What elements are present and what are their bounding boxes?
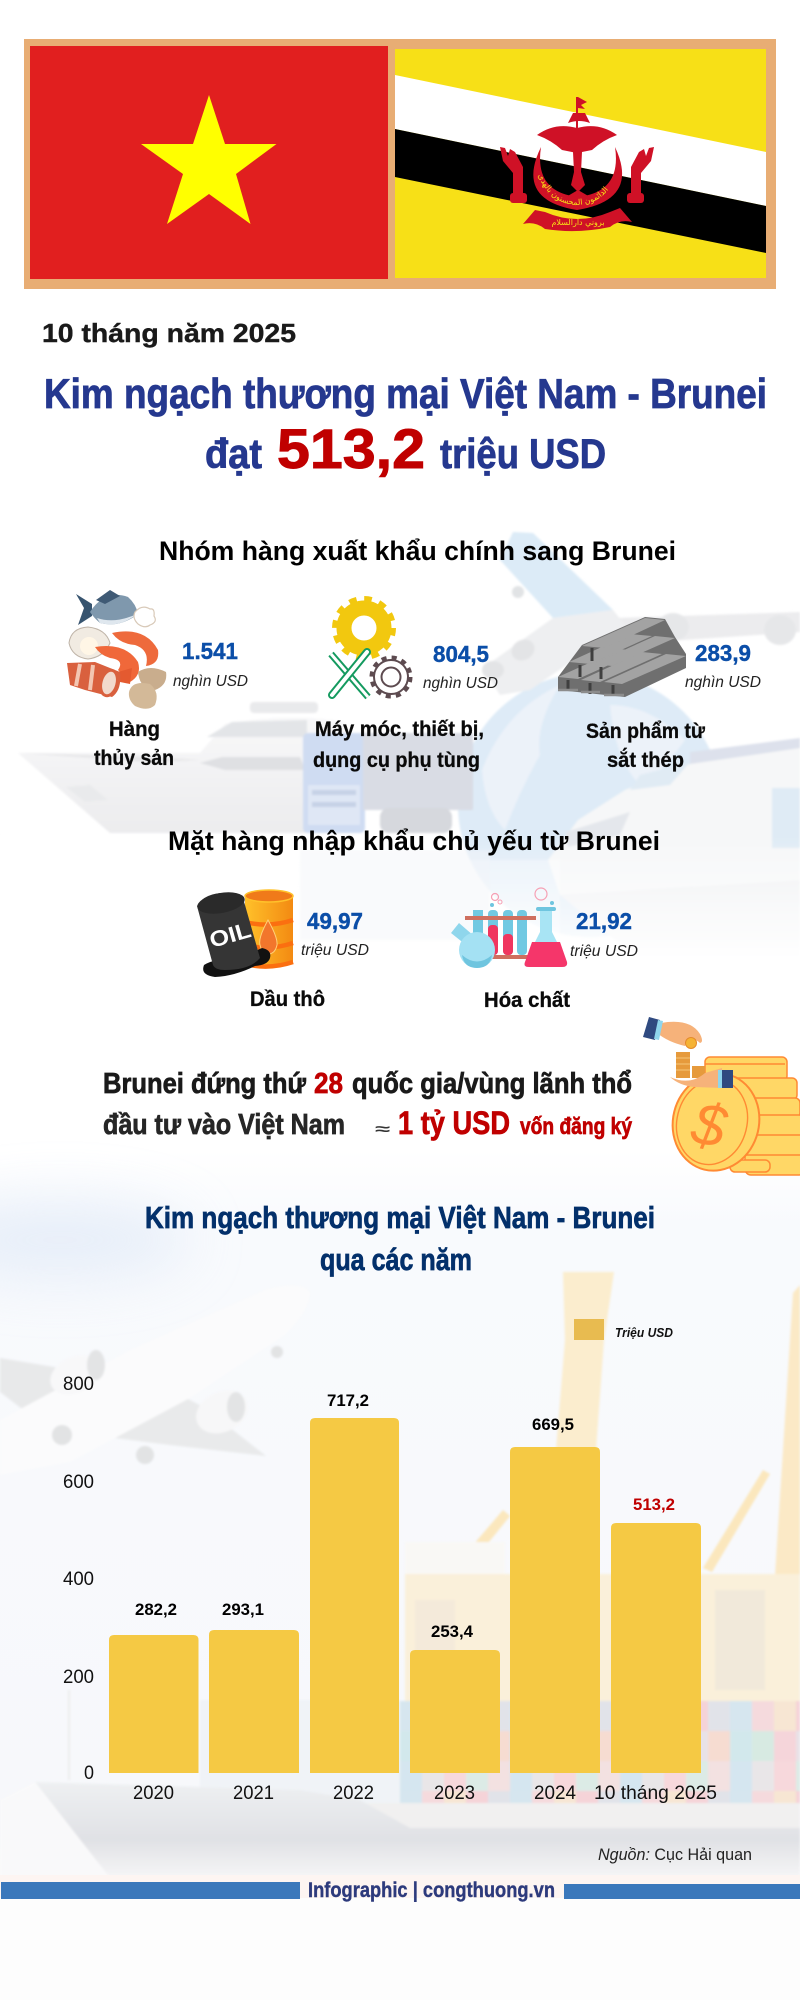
unit: chemicals: triệu USD (570, 943, 638, 960)
bar: 2020: 282,2 (135, 1600, 177, 1619)
bar: 2022 (310, 1391, 399, 1804)
heading: imports: Mặt hàng nhập khẩu chủ yếu từ Brunei (168, 826, 660, 856)
text line 1: quốc gia/vùng lãnh thổ (352, 1068, 632, 1100)
unit: crude oil: triệu USD (301, 942, 369, 959)
value: crude oil: 49,97 (307, 908, 363, 934)
source: Nguồn: Cục Hải quan (598, 1845, 752, 1864)
value: machinery: 804,5 (433, 641, 489, 667)
reflection haze (0, 835, 800, 960)
globe (458, 673, 722, 937)
icon: oil barrels: OIL (206, 917, 254, 953)
background image: transport collage (0, 532, 800, 960)
footer (1, 1879, 800, 1902)
flag: Brunei: بروني دارالسلام (551, 218, 605, 227)
label: machinery (313, 718, 484, 772)
bar: 2023: 253,4 (431, 1622, 474, 1641)
containers (200, 1700, 800, 1828)
icon: hands and coins (643, 1017, 800, 1180)
icon: seafood (67, 590, 166, 709)
text line 2: ≈ (375, 1121, 390, 1138)
text line 2: 1 tỷ USD (398, 1105, 510, 1141)
panel: flags (24, 39, 776, 289)
panel: exports (67, 536, 761, 772)
flag: Vietnam (30, 46, 388, 279)
panel: chart section (63, 1200, 752, 1864)
text line 2 (103, 1105, 632, 1141)
y axis labels: 600 (63, 1472, 94, 1493)
title: triệu USD (440, 430, 606, 477)
label: steel (586, 720, 706, 772)
text line 1: Brunei đứng thứ (103, 1068, 306, 1100)
title (44, 370, 767, 480)
y axis labels: 800 (63, 1374, 94, 1395)
icon: hands and coins: $ (686, 1089, 733, 1161)
panel: investment callout (103, 1017, 800, 1180)
icon: machinery (331, 600, 410, 697)
cranes (405, 1272, 800, 1701)
bar: 2022: 717,2 (327, 1391, 369, 1410)
icon: steel beams (558, 617, 686, 697)
emblem inscription (538, 172, 618, 205)
cargo ship hull (0, 1690, 800, 1878)
plane top right (482, 532, 800, 695)
label: steel: sắt thép (607, 748, 684, 772)
chart heading: qua các năm (320, 1242, 472, 1277)
flag: Brunei: الدائمون المحسنون بالهدى (538, 175, 608, 206)
sky tint (0, 1202, 190, 1278)
emblem (500, 97, 654, 231)
bar chart (109, 1391, 717, 1804)
flag: Brunei (395, 49, 766, 278)
unit: machinery: nghìn USD (423, 675, 498, 692)
title: 513,2 (277, 417, 425, 480)
text line 2: đầu tư vào Việt Nam (103, 1109, 345, 1141)
bar: 2021 (209, 1600, 299, 1804)
label: seafood: thủy sản (94, 747, 174, 770)
bar: 2024: 2024 (534, 1783, 576, 1804)
plane bottom left (0, 1285, 310, 1475)
label: machinery: Máy móc, thiết bị, (315, 718, 484, 741)
label: steel: Sản phẩm từ (586, 720, 706, 743)
label: chemicals: Hóa chất (484, 989, 570, 1012)
bar: 2024: 669,5 (532, 1415, 574, 1434)
bar: 2022: 2022 (333, 1783, 374, 1804)
bar: 10 months 2025 (594, 1495, 717, 1804)
text line 2: vốn đăng ký (520, 1113, 632, 1139)
label: machinery: dụng cụ phụ tùng (313, 749, 480, 772)
bar: 2023 (410, 1622, 500, 1804)
bar: 2020 (109, 1600, 198, 1804)
bar: 2020: 2020 (133, 1783, 174, 1804)
truck (303, 733, 473, 833)
value: chemicals: 21,92 (576, 908, 632, 934)
y axis labels (63, 1374, 94, 1784)
legend (574, 1319, 674, 1340)
y axis labels: 200 (63, 1667, 94, 1688)
bar: 10 months 2025: 513,2 (633, 1495, 675, 1514)
chart heading (145, 1200, 655, 1277)
bar: 2023: 2023 (434, 1783, 475, 1804)
text line 1: 28 (314, 1068, 343, 1100)
bar: 2021: 293,1 (222, 1600, 264, 1619)
bar: 2024 (510, 1415, 600, 1804)
bar: 2021: 2021 (233, 1783, 274, 1804)
frame (24, 39, 776, 289)
text line 1 (103, 1068, 632, 1100)
date line: 10 tháng năm 2025 (42, 318, 296, 348)
footer: Infographic | congthuong.vn (308, 1879, 555, 1902)
value: seafood: 1.541 (182, 638, 238, 664)
legend: Triệu USD (615, 1325, 674, 1340)
label: seafood: Hàng (109, 718, 160, 741)
icon: oil barrels (196, 889, 293, 977)
title: đạt (205, 430, 262, 477)
background image: port and cargo ship (0, 1150, 800, 2000)
heading: exports: Nhóm hàng xuất khẩu chính sang Brunei (159, 536, 676, 566)
y axis labels: 0 (84, 1763, 94, 1784)
train (548, 738, 800, 960)
panel: imports (168, 826, 660, 1012)
value: steel: 283,9 (695, 640, 751, 666)
icon: lab glassware (451, 888, 567, 968)
y axis labels: 400 (63, 1569, 94, 1590)
label: crude oil: Dầu thô (250, 988, 325, 1011)
chart heading: Kim ngạch thương mại Việt Nam - Brunei (145, 1200, 655, 1235)
unit: steel: nghìn USD (685, 674, 761, 691)
ship (18, 702, 345, 833)
unit: seafood: nghìn USD (173, 673, 248, 690)
bar: 10 months 2025: 10 tháng 2025 (594, 1783, 717, 1804)
label: seafood (94, 718, 174, 770)
